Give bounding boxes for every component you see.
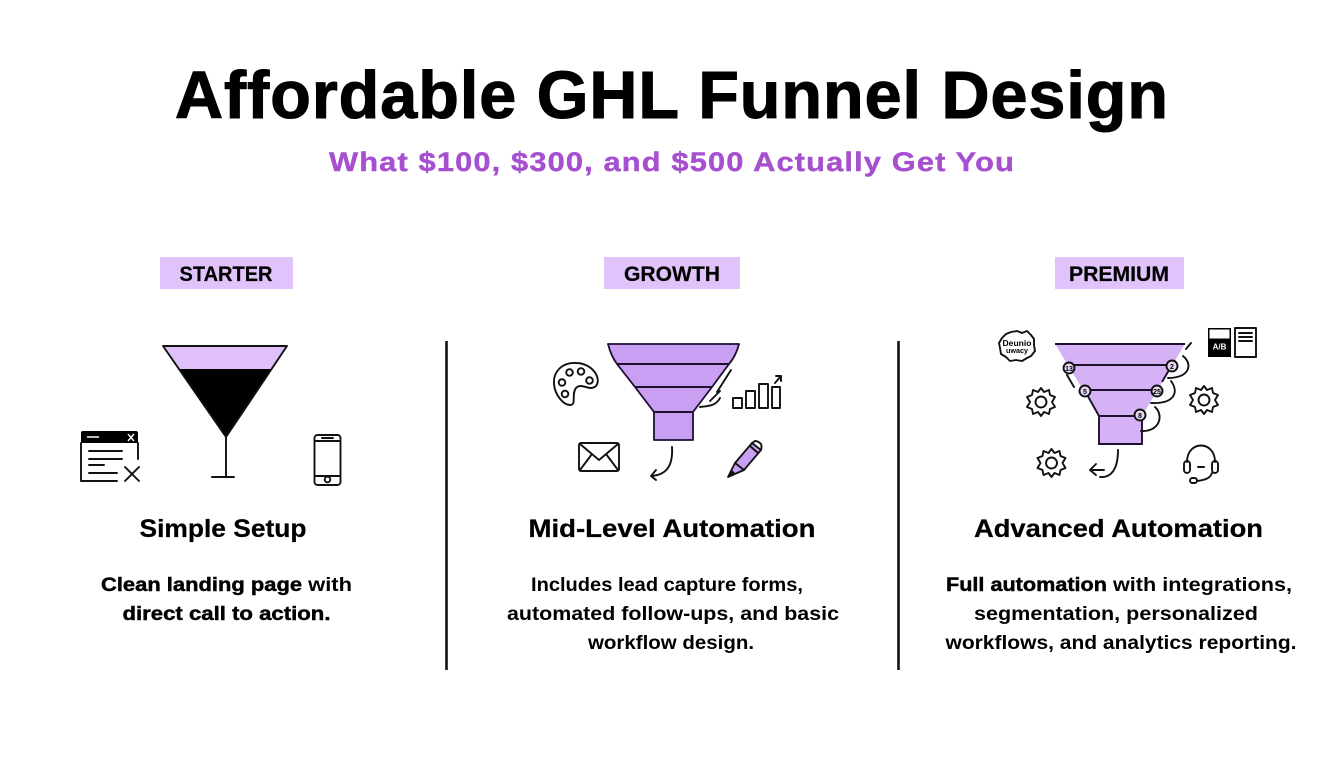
- icon: premium funnel: [1055, 343, 1191, 444]
- starter description: [101, 575, 352, 625]
- icon: headset: [1184, 446, 1218, 483]
- premium description: workflows, and analytics reporting.: [944, 633, 1296, 654]
- growth description: Includes lead capture forms,: [531, 575, 803, 596]
- growth description: workflow design.: [587, 633, 754, 654]
- icon: badge seal: [999, 331, 1035, 361]
- icon: growth bars: [733, 376, 781, 408]
- growth badge: [604, 257, 740, 289]
- title: Affordable GHL Funnel Design: [175, 58, 1169, 133]
- funnel step markers: 5: [1083, 389, 1087, 396]
- subtitle: What $100, $300, and $500 Actually Get You: [329, 147, 1015, 177]
- starter heading: Simple Setup: [140, 515, 306, 543]
- funnel step markers: [1064, 360, 1178, 420]
- divider left: [445, 341, 448, 670]
- panel: premium: [944, 257, 1296, 654]
- icon: starter funnel: [163, 346, 287, 477]
- funnel step markers: 25: [1153, 389, 1161, 396]
- icon: A/B test pages: [1208, 328, 1256, 357]
- growth description: automated follow-ups, and basic: [507, 604, 839, 625]
- curved arrow near funnel: [700, 370, 731, 407]
- starter badge: [160, 257, 293, 289]
- icon: A/B test pages: A/B: [1213, 342, 1227, 352]
- icon: growth funnel: [608, 344, 739, 440]
- icon: down arrow: [1090, 450, 1118, 477]
- premium description: [944, 575, 1296, 654]
- icon: gear right: [1190, 386, 1218, 414]
- premium description: Full automation with integrations,: [946, 575, 1292, 596]
- icon: browser window with x: [81, 431, 139, 481]
- starter description: Clean landing page with: [101, 575, 352, 596]
- premium badge: [1055, 257, 1184, 289]
- icon: gear bottom: [1038, 449, 1066, 477]
- icon: badge seal: uwacy: [1006, 348, 1028, 355]
- divider right: [897, 341, 900, 670]
- starter badge: STARTER: [180, 263, 272, 286]
- icon: palette: [554, 363, 598, 405]
- icon: smartphone: [314, 435, 340, 485]
- icon: badge seal: Deunio: [1002, 339, 1032, 348]
- starter description: direct call to action.: [122, 604, 330, 625]
- icon: envelope: [579, 443, 619, 471]
- panel: growth: [507, 257, 839, 654]
- premium heading: Advanced Automation: [974, 515, 1263, 543]
- funnel step markers: 8: [1138, 413, 1142, 420]
- icon: gear left: [1027, 388, 1055, 416]
- funnel step markers: 2: [1170, 364, 1174, 371]
- premium badge: PREMIUM: [1069, 263, 1169, 286]
- icon: pencil: [728, 441, 762, 477]
- growth badge: GROWTH: [624, 263, 720, 286]
- icon: down arrow: [651, 447, 672, 480]
- panel: starter: [81, 257, 352, 625]
- funnel step markers: 13: [1065, 366, 1073, 373]
- growth description: [507, 575, 839, 654]
- premium description: segmentation, personalized: [974, 604, 1258, 625]
- growth heading: Mid-Level Automation: [528, 515, 816, 543]
